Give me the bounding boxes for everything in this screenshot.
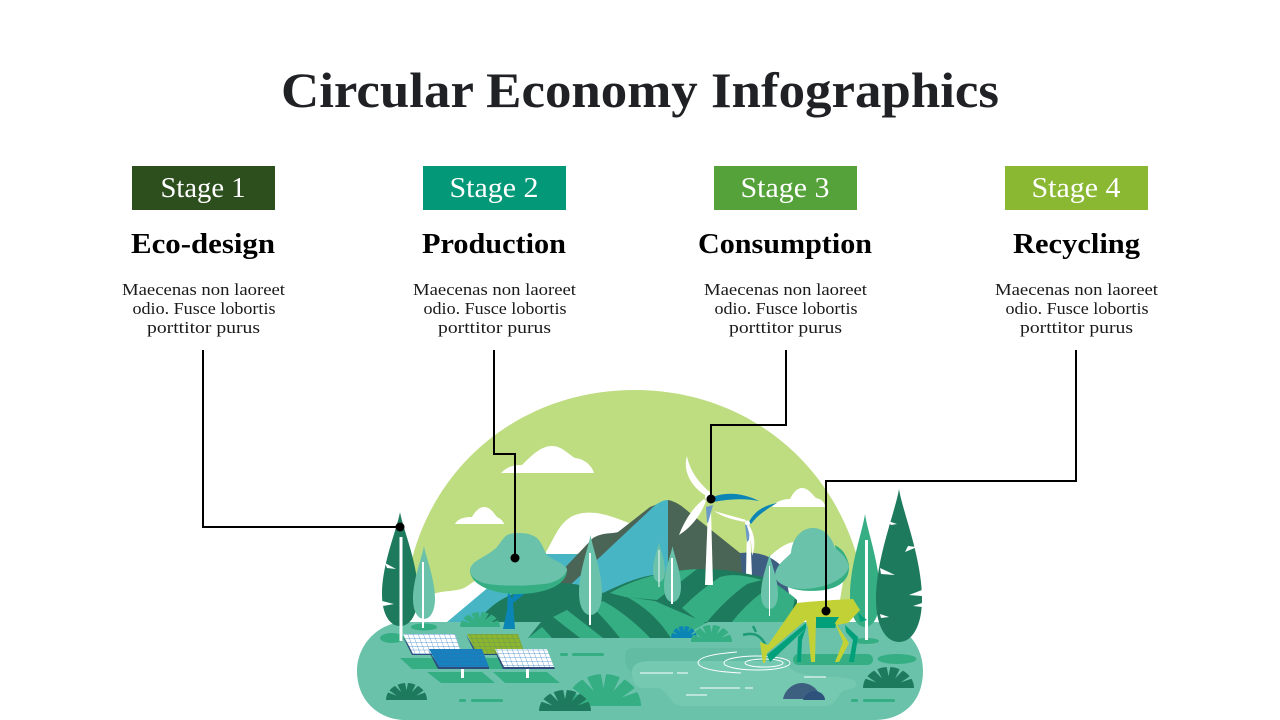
badge [1005,166,1148,210]
ripples [640,652,826,695]
trunk [806,586,828,602]
body text: porttitor purus [147,318,260,337]
trunk [400,537,402,641]
body text [413,280,576,337]
blue blade [713,494,759,502]
shrub: bottom left [386,683,427,700]
wind turbine: back [714,503,777,576]
mountain: blue side [560,500,668,620]
ellipse: ground spot [878,654,916,664]
body text: porttitor purus [438,318,551,337]
white blade up [686,456,711,497]
wind turbine: front [679,456,759,585]
trunk [865,540,868,640]
nacelle shade [706,505,713,523]
shrub: mid right of hills [691,625,732,642]
body [760,599,860,663]
connector lines [203,350,1076,611]
trunk [422,562,424,628]
connector 2 [494,350,515,558]
heading: Eco-design [131,229,275,260]
white blade down [679,499,706,535]
connector 3 [711,350,786,499]
shadow [853,638,879,644]
dashes [459,653,895,702]
body text [995,280,1158,337]
panel 1 white [402,635,462,655]
big tree right [775,528,849,602]
far legs and belly [767,613,867,662]
trunk [503,592,527,629]
cloud: behind right tree [765,542,845,600]
panel: stage 1 [122,166,285,337]
solar panels [400,634,560,683]
back mountain: blue [447,554,600,622]
body text [704,280,867,337]
antlers [743,626,766,646]
notches [382,563,396,606]
river band [625,648,780,672]
big tree left [470,533,567,629]
shrub: bottom right [863,667,914,688]
body text: Maecenas non laoreet [995,280,1158,299]
body text: odio. Fusce lobortis [714,299,858,318]
body text: odio. Fusce lobortis [424,299,566,318]
shrub: bottom dark [539,690,591,711]
deer shadow [793,654,873,665]
panel 3 blue [428,650,489,669]
badge label: Stage 3 [740,173,830,204]
mountain: far blue-navy hill [740,553,790,600]
shadow [380,633,404,643]
sun dome [405,390,866,600]
small background trees [579,535,778,625]
field stripes [528,627,552,638]
canopy [470,533,567,586]
body text: Maecenas non laoreet [704,280,867,299]
ground [357,622,923,720]
cloud: small left [455,507,504,524]
deer [743,599,873,665]
cloud: upper left [501,446,594,473]
body text: Maecenas non laoreet [122,280,285,299]
tree: dark left [380,512,418,643]
crown [876,489,922,642]
hill base [477,569,797,640]
body text: odio. Fusce lobortis [1006,299,1148,318]
blades [749,503,777,524]
canopy rim [470,570,567,594]
tower [705,510,713,585]
panel shadows [400,658,505,669]
nacelle shade [745,524,750,542]
body text: porttitor purus [1020,318,1133,337]
badge label: Stage 2 [450,173,538,204]
panel: stage 2 [413,166,576,337]
body text: porttitor purus [729,318,842,337]
badge [423,166,566,210]
rocks [783,683,825,700]
mountain: dark side [558,500,775,640]
shadow [411,624,437,630]
panel: stage 3 [698,166,872,337]
tower [746,527,752,576]
tree a [653,542,665,582]
hills [477,569,797,640]
connector 4 [826,350,1076,611]
tree: light left [411,546,437,630]
shrub: mid behind big tree [460,612,500,627]
canopy rim [775,545,849,591]
posts [461,669,464,678]
cloud: lower left [420,578,500,624]
crown [382,512,418,626]
badge [132,166,275,210]
tree middle [579,535,602,615]
cloud: behind mountain [540,513,640,560]
crown [413,546,435,619]
heading: Consumption [698,229,872,260]
tree b [664,546,681,602]
crown [850,514,880,627]
badge label: Stage 1 [160,173,246,204]
panel: stage 4 [995,166,1158,337]
pond [632,661,856,706]
canopy [775,528,849,589]
heading: Recycling [1013,229,1140,260]
heading: Production [422,229,566,260]
title: Circular Economy Infographics [281,62,999,118]
connector dots [396,494,830,616]
illustration: eco landscape [203,350,1076,720]
body text [122,280,285,337]
connector 1 [203,350,400,527]
body text: Maecenas non laoreet [413,280,576,299]
shrub: blue [671,626,697,638]
shrub: bottom mid large [566,674,641,706]
shrubs [386,612,914,711]
notches [880,521,922,618]
body text: odio. Fusce lobortis [132,299,276,318]
badge label: Stage 4 [1032,173,1120,204]
tree c [761,554,778,609]
cloud: right [772,488,825,507]
panel 2 olive [466,635,525,655]
badge [714,166,857,210]
tree: big dark right [876,489,922,642]
tree: mid tall right [850,514,880,644]
panel 4 white [494,650,555,669]
